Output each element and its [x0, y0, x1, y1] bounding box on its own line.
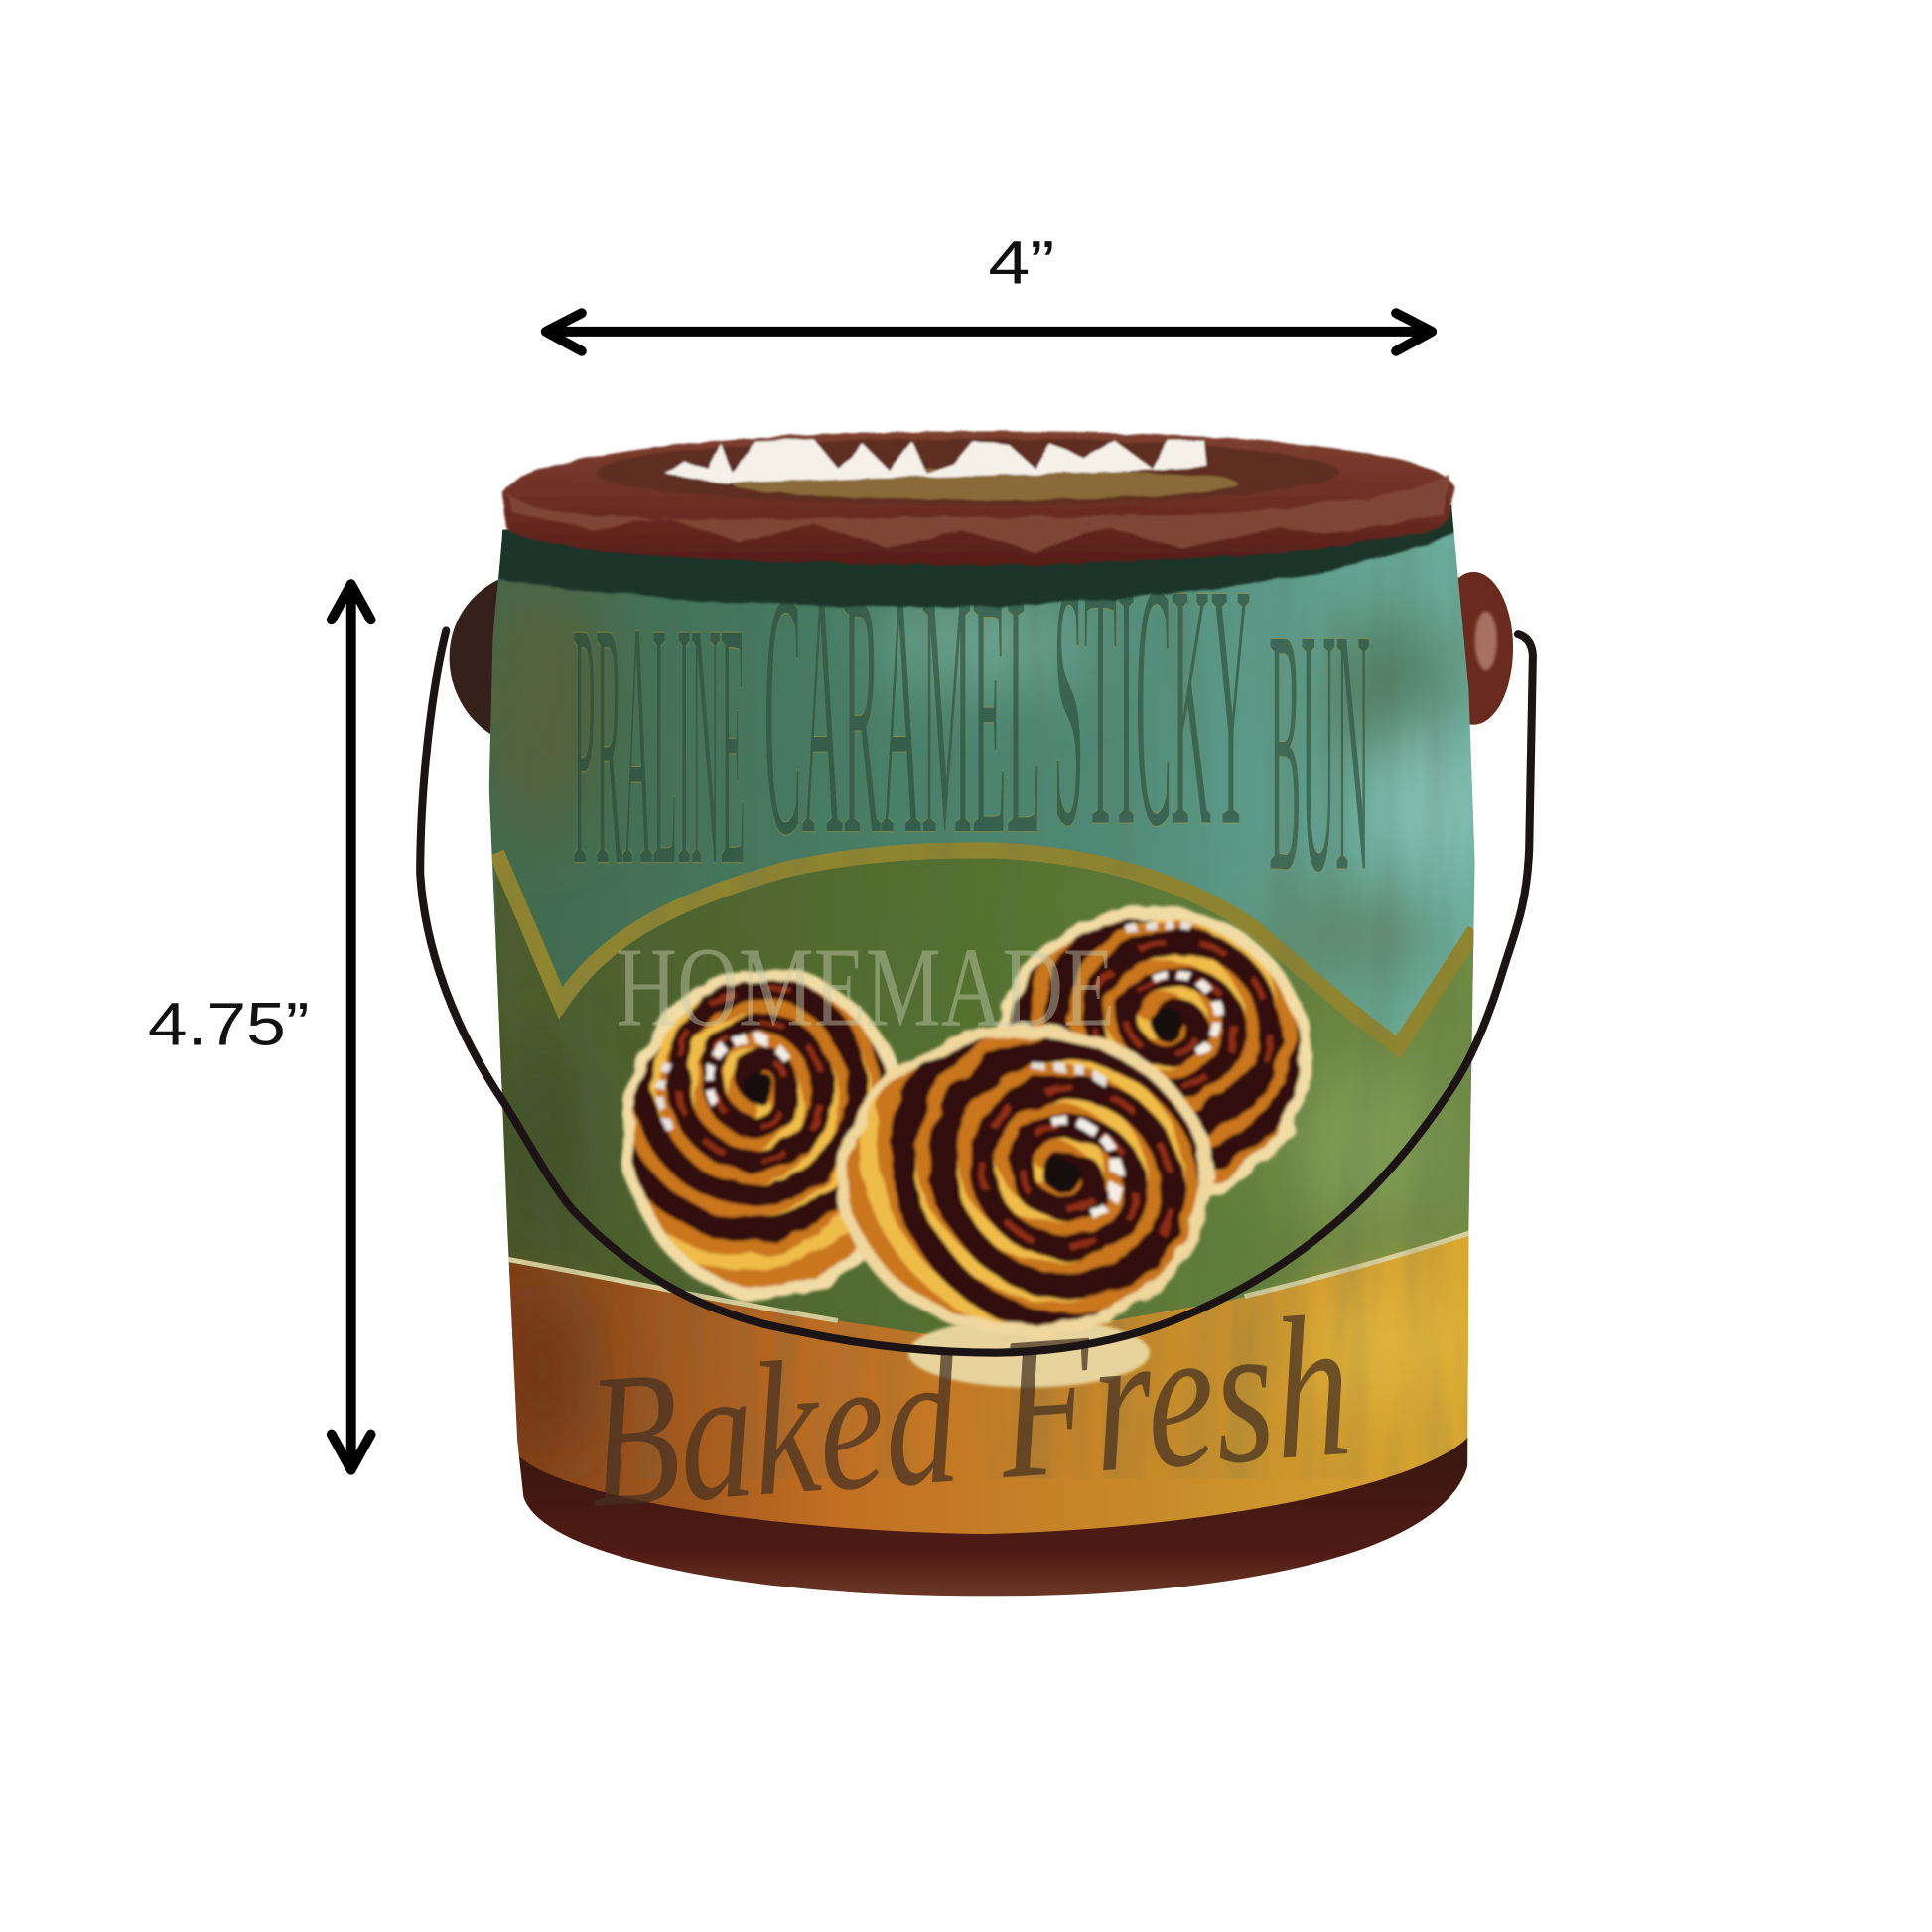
wax surface [733, 469, 1238, 500]
olive panel [492, 850, 1478, 1368]
width label: 4” [988, 228, 1054, 296]
baked fresh script: Baked [582, 1311, 966, 1548]
teal label background [481, 492, 1491, 1109]
rim outer [502, 431, 1453, 564]
orange lower band [492, 1232, 1478, 1553]
can body with label [481, 492, 1491, 1601]
plate under buns [908, 1318, 1150, 1387]
cream pinstripe [507, 1232, 1472, 1320]
rim upper worn edge [507, 475, 1449, 552]
band colour variation [505, 1282, 1478, 1453]
center bun [832, 1019, 1218, 1338]
texture streaks [525, 550, 1467, 1479]
can opening [595, 439, 1339, 505]
height label: 4.75” [148, 990, 310, 1057]
bottom brown band [515, 1432, 1472, 1601]
rim [502, 431, 1453, 564]
left lug [450, 579, 499, 737]
cinnamon buns [619, 903, 1314, 1338]
right lug [1435, 572, 1513, 725]
gold chevron border [496, 850, 1475, 1047]
label colour variation [481, 567, 1478, 973]
wax chips [665, 439, 1207, 483]
height arrow [332, 584, 371, 1470]
product name text [574, 592, 1369, 873]
baked fresh script: Fresh [990, 1274, 1357, 1522]
dark green neck band [498, 505, 1454, 610]
height dimension [148, 584, 371, 1470]
metal handle [420, 630, 1533, 1353]
left bun [619, 967, 899, 1303]
olive panel light area [505, 1035, 1453, 1257]
baked fresh script [581, 1274, 1357, 1551]
width dimension [546, 228, 1432, 351]
homemade text: HOMEMADE [617, 924, 1115, 1050]
product: paint-can candle [420, 431, 1533, 1601]
width arrow [546, 313, 1432, 351]
right bun [995, 903, 1314, 1197]
